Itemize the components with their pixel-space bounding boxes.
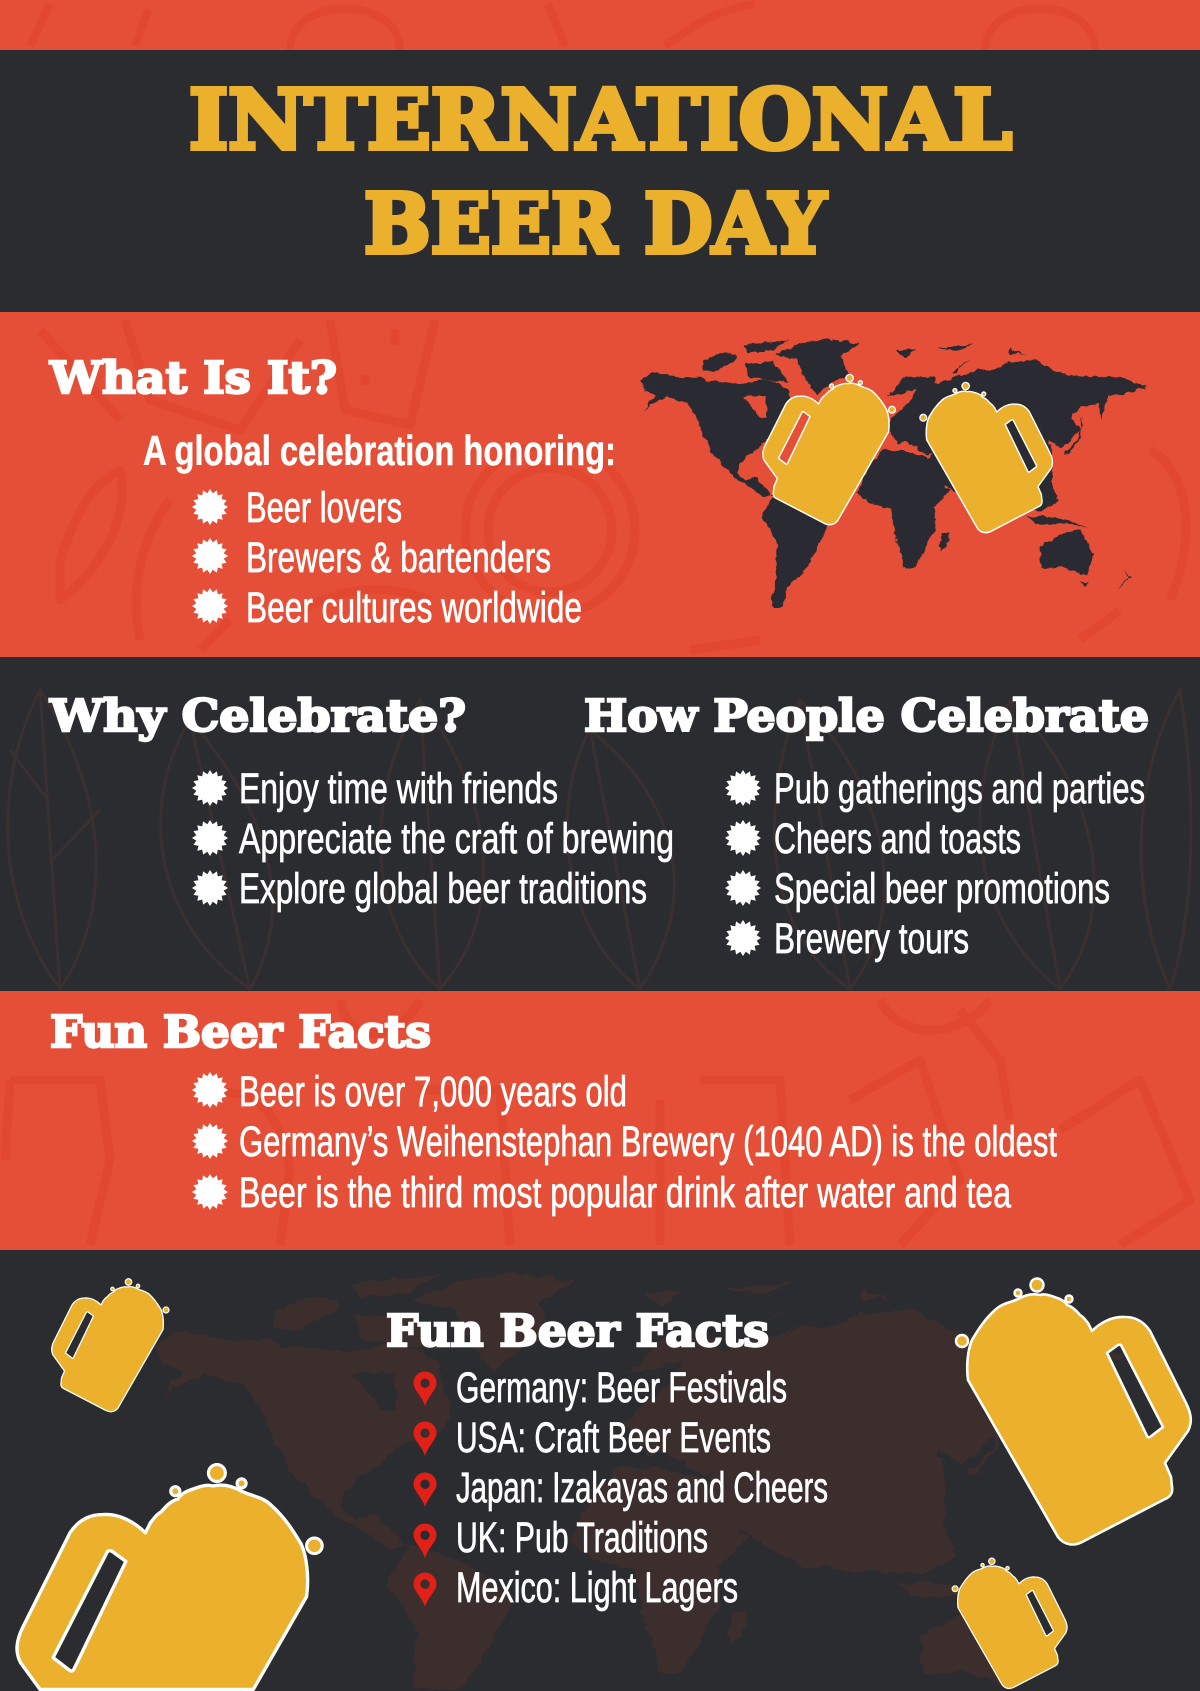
panel: title band — [0, 50, 1200, 312]
icon: left beer mug — [763, 374, 895, 525]
panel: celebrations by country — [0, 1250, 1200, 1691]
heading: country list: Fun Beer Facts — [386, 1306, 769, 1357]
panel: fun beer facts — [0, 991, 1200, 1250]
icon: right beer mug — [920, 382, 1053, 533]
country list: Japan: Izakayas and Cheers — [456, 1464, 828, 1512]
bullet list: why celebrate: Appreciate the craft of brewing — [239, 815, 674, 863]
heading: how people celebrate: How People Celebrate — [584, 691, 1149, 742]
panel: why and how — [0, 657, 1200, 991]
country list: Germany: Beer Festivals — [456, 1364, 787, 1412]
bullet list: fun beer facts: Beer is over 7,000 years old — [239, 1068, 627, 1116]
bullet list: what is it: Beer lovers — [246, 484, 402, 532]
panel: what is it — [0, 312, 1200, 657]
icon: beer mug bottom left — [17, 1465, 322, 1689]
bullet list: how people celebrate: Cheers and toasts — [774, 815, 1021, 863]
bullet list: how people celebrate — [725, 765, 1145, 963]
background world map — [156, 1274, 1125, 1689]
subheading: A global celebration honoring: — [143, 427, 616, 474]
country list: Mexico: Light Lagers — [456, 1564, 738, 1612]
bullet list: why celebrate — [192, 765, 674, 913]
country list — [414, 1364, 828, 1612]
panel: top banner — [0, 0, 1200, 50]
title: INTERNATIONAL — [189, 72, 1012, 168]
icon: beer mug top right — [956, 1278, 1191, 1544]
bullet list: what is it: Beer cultures worldwide — [246, 584, 582, 632]
title — [189, 72, 1012, 272]
heading: why celebrate: Why Celebrate? — [49, 691, 466, 742]
bullet list: how people celebrate: Brewery tours — [774, 915, 969, 963]
icon: beer mug top left — [52, 1279, 169, 1412]
icon: beer mug bottom right — [952, 1558, 1067, 1688]
world map with clinking mugs — [641, 339, 1147, 608]
country list: UK: Pub Traditions — [456, 1514, 708, 1562]
title: BEER DAY — [364, 176, 827, 272]
bullet list: why celebrate: Enjoy time with friends — [239, 765, 558, 813]
bullet list: what is it — [192, 484, 582, 632]
country list: USA: Craft Beer Events — [456, 1414, 771, 1462]
heading: fun beer facts: Fun Beer Facts — [50, 1007, 431, 1058]
bullet list: why celebrate: Explore global beer traditions — [239, 865, 647, 913]
bullet list: fun beer facts — [192, 1068, 1057, 1217]
heading: what is it: What Is It? — [49, 353, 337, 404]
bullet list: what is it: Brewers & bartenders — [246, 534, 551, 582]
